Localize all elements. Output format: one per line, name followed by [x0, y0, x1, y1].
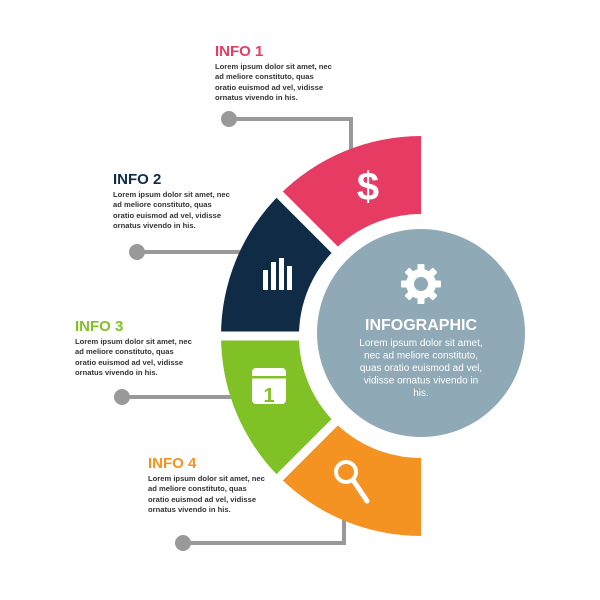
- center text: Lorem ipsum dolor sit amet,: [359, 338, 483, 349]
- center circle: [317, 229, 525, 437]
- center text: his.: [413, 388, 429, 399]
- heading: info 3: INFO 3: [75, 318, 123, 335]
- center text: nec ad meliore constituto,: [364, 350, 478, 362]
- center text: vidisse ornatus vivendo in: [364, 376, 478, 386]
- center text: [359, 338, 483, 399]
- connector 4: [175, 510, 344, 551]
- icon: dollar: $: [357, 165, 379, 209]
- text: info 1: oratio euismod ad vel, vidisse: [215, 83, 323, 92]
- text: info 2: oratio euismod ad vel, vidisse: [113, 211, 221, 220]
- segment: orange: [280, 422, 421, 536]
- text: info 4: Lorem ipsum dolor sit amet, nec: [148, 474, 265, 483]
- heading: info 1: INFO 1: [215, 43, 263, 60]
- text: info 2: ad meliore constituto, quas: [113, 200, 212, 209]
- segment: navy: [221, 195, 335, 336]
- text: info 1: ad meliore constituto, quas: [215, 72, 314, 81]
- icon: calendar: 1: [263, 385, 275, 407]
- icon: bar chart: [263, 258, 292, 290]
- icon: gear: [401, 264, 441, 304]
- text: info 3: Lorem ipsum dolor sit amet, nec: [75, 337, 192, 346]
- text: info 2: [113, 190, 230, 230]
- text: info 4: ad meliore constituto, quas: [148, 484, 247, 493]
- icon: calendar: [252, 368, 286, 407]
- segment: pink: [280, 136, 421, 250]
- text: info 3: ad meliore constituto, quas: [75, 347, 174, 356]
- text: info 2: Lorem ipsum dolor sit amet, nec: [113, 190, 230, 199]
- center title: INFOGRAPHIC: [365, 317, 477, 334]
- text: info 4: oratio euismod ad vel, vidisse: [148, 495, 256, 504]
- connector 3: [114, 389, 250, 405]
- icon: magnifier: [336, 462, 367, 501]
- heading: info 2: INFO 2: [113, 171, 161, 188]
- text: info 3: [75, 337, 192, 377]
- heading: info 4: INFO 4: [148, 455, 196, 472]
- text: info 1: ornatus vivendo in his.: [215, 93, 298, 102]
- text: info 4: ornatus vivendo in his.: [148, 505, 231, 514]
- connector 2: [129, 244, 245, 260]
- text: info 2: ornatus vivendo in his.: [113, 221, 196, 230]
- text: info 1: Lorem ipsum dolor sit amet, nec: [215, 62, 332, 71]
- text: info 1: [215, 62, 332, 102]
- segment: green: [221, 336, 335, 477]
- text: info 3: oratio euismod ad vel, vidisse: [75, 358, 183, 367]
- connector 1: [221, 111, 351, 160]
- center text: quas oratio euismod ad vel,: [360, 363, 482, 374]
- text: info 4: [148, 474, 265, 514]
- text: info 3: ornatus vivendo in his.: [75, 368, 158, 377]
